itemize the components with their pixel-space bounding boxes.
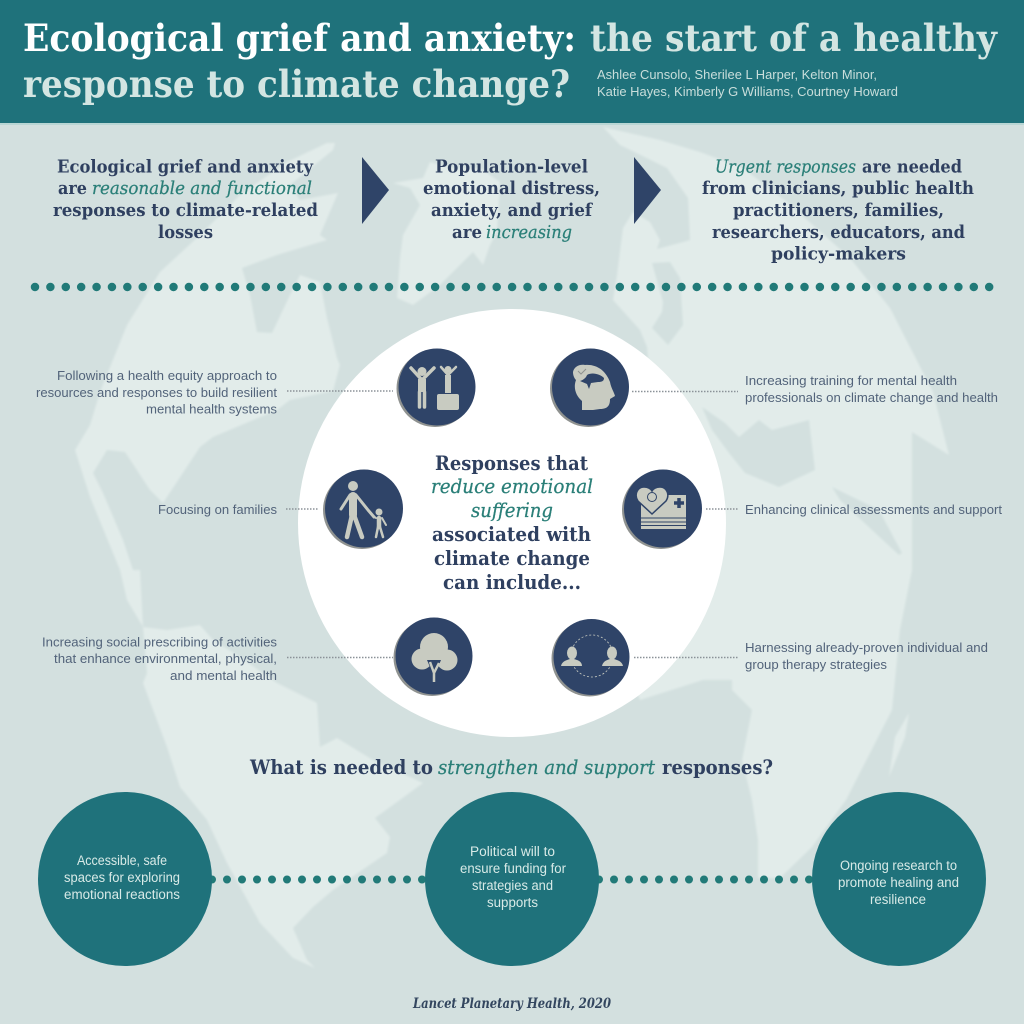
title: [23, 16, 998, 106]
title: Ecological grief and anxiety:: [23, 16, 576, 60]
source citation: Lancet Planetary Health, 2020: [412, 996, 611, 1012]
icon: adult and child: [323, 470, 403, 549]
circle: ongoing research: [812, 792, 986, 966]
statement: urgent responses: practitioners, families,: [733, 200, 944, 221]
white central circle: [298, 309, 726, 737]
subheading: What is needed to: [249, 755, 433, 779]
statement: reasonable responses: [53, 156, 318, 243]
label: social prescribing: that enhance environmental, physical,: [54, 651, 277, 666]
circle: ongoing research: Ongoing research to: [840, 858, 957, 873]
statement: reasonable responses: responses to climate-related: [53, 200, 318, 221]
statement: distress increasing: anxiety, and grief: [431, 200, 593, 221]
central text: reduce emotional: [431, 474, 593, 498]
statement: urgent responses: Urgent responses: [715, 156, 856, 178]
subheading: strengthen and support: [438, 755, 656, 779]
central text: associated with: [432, 522, 591, 546]
circle: ongoing research: promote healing and: [838, 875, 959, 890]
statement: reasonable responses: reasonable and functional: [92, 178, 312, 199]
central text: suffering: [471, 498, 553, 522]
label: health equity: mental health systems: [146, 402, 277, 416]
circle: ongoing research: resilience: [870, 892, 926, 907]
statement: reasonable responses: are: [58, 178, 87, 199]
circle: safe spaces: [38, 792, 212, 966]
label: social prescribing: and mental health: [170, 668, 277, 683]
statement: reasonable responses: losses: [158, 222, 213, 243]
label: clinical assessments: Enhancing clinical assessments and support: [745, 502, 1002, 517]
icon: two people therapy: [552, 619, 630, 696]
subheading: responses?: [662, 755, 773, 779]
statement: distress increasing: [423, 156, 600, 243]
label: social prescribing: [42, 634, 278, 683]
icon: people raised on a box: [396, 348, 476, 427]
statement: distress increasing: increasing: [486, 222, 572, 243]
icon: head with brain: [550, 348, 629, 427]
circle: political will: strategies and: [472, 878, 553, 893]
circle: political will: Political will to: [470, 844, 555, 859]
central text: [431, 451, 593, 594]
circle: political will: [425, 792, 599, 966]
title: response to climate change?: [23, 62, 570, 106]
label: therapy strategies: Harnessing already-proven individual and: [745, 640, 988, 655]
authors: Ashlee Cunsolo, Sherilee L Harper, Kelton Minor,: [597, 67, 877, 82]
label: therapy strategies: [745, 640, 988, 672]
statement: urgent responses: policy-makers: [771, 244, 906, 264]
header banner: [0, 0, 1024, 125]
statement: distress increasing: are: [452, 222, 482, 243]
label: health equity: [36, 368, 277, 416]
label: families: Focusing on families: [158, 502, 278, 517]
central text: Responses that: [435, 451, 589, 475]
authors: [597, 67, 898, 99]
authors: Katie Hayes, Kimberly G Williams, Courtney Howard: [597, 84, 898, 99]
background globe map: [75, 127, 949, 968]
statement: reasonable responses: Ecological grief and anxiety: [57, 156, 313, 178]
arrow 2: [634, 157, 661, 224]
label: social prescribing: Increasing social prescribing of activities: [42, 634, 278, 650]
label: therapy strategies: group therapy strategies: [745, 657, 887, 672]
subheading: [249, 755, 773, 779]
label: training: [745, 373, 998, 405]
circle: safe spaces: Accessible, safe: [77, 853, 167, 868]
label: training: professionals on climate change and health: [745, 390, 998, 405]
title: the start of a healthy: [590, 16, 998, 60]
statement: urgent responses: from clinicians, public health: [702, 178, 974, 199]
arrow 1: [362, 157, 389, 224]
statement: urgent responses: are needed: [862, 156, 962, 178]
circle: safe spaces: emotional reactions: [64, 887, 180, 902]
statement: urgent responses: [702, 156, 974, 264]
central text: can include...: [443, 570, 581, 594]
central text: climate change: [434, 546, 590, 570]
circle: safe spaces: spaces for exploring: [64, 870, 180, 885]
label: health equity: Following a health equity approach to: [57, 368, 277, 383]
statement: distress increasing: emotional distress,: [423, 178, 600, 199]
statement: urgent responses: researchers, educators, and: [712, 222, 965, 243]
icon: clinical record with heart: [622, 470, 702, 549]
icon: tree: [394, 618, 472, 696]
label: health equity: resources and responses to build resilient: [36, 385, 277, 400]
circle: political will: ensure funding for: [460, 861, 566, 876]
circle: political will: supports: [487, 895, 538, 910]
statement: distress increasing: Population-level: [435, 156, 588, 178]
label: training: Increasing training for mental health: [745, 373, 957, 388]
